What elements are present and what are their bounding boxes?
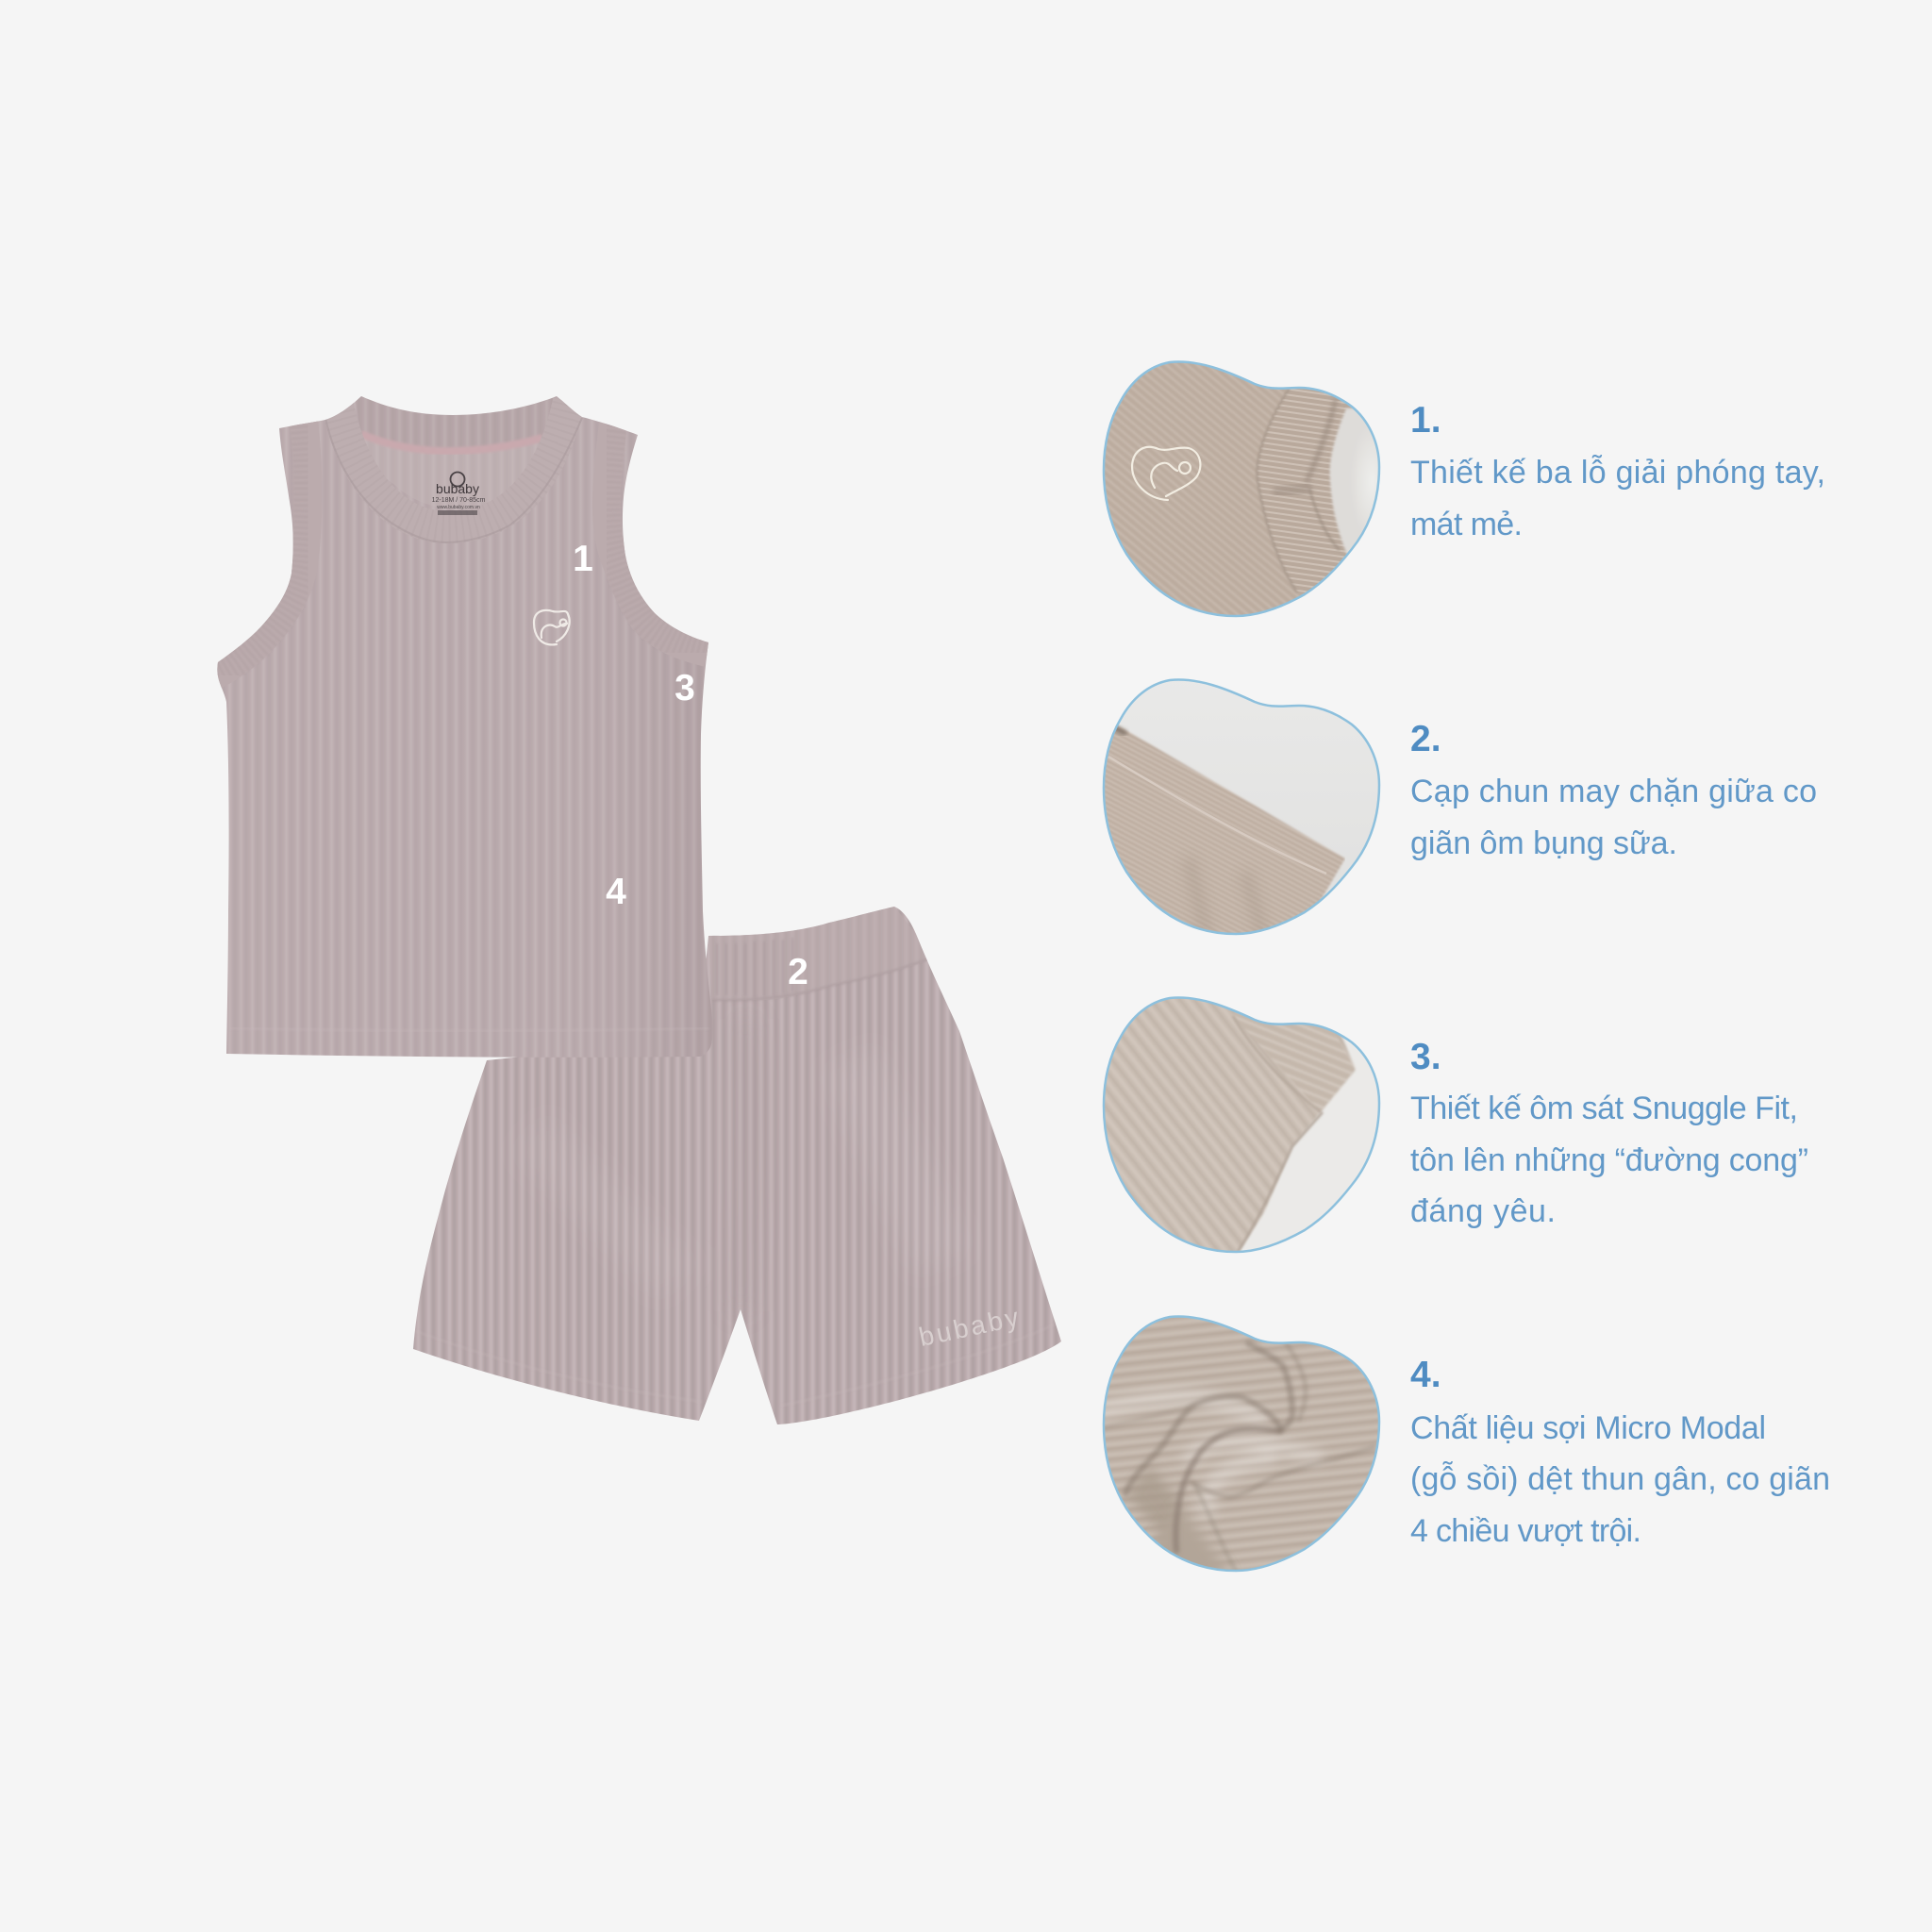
description 4: (gỗ sồi) dệt thun gân, co giãn xyxy=(1410,1461,1830,1497)
description 1 xyxy=(1410,455,1825,542)
marker 3: 3 xyxy=(675,668,695,708)
marker 4: 4 xyxy=(606,872,626,912)
number 2: 2. xyxy=(1410,719,1441,759)
detail photo 3: snuggle fit hem xyxy=(1099,992,1387,1261)
feature text 3 xyxy=(1410,1037,1808,1229)
number 4: 4. xyxy=(1410,1355,1441,1395)
description 2: giãn ôm bụng sữa. xyxy=(1410,825,1677,861)
heart outline xyxy=(1104,680,1379,934)
product: ribbed tank top xyxy=(208,387,726,1066)
brand text on shorts: bubaby xyxy=(916,1302,1024,1352)
neck label: bubaby xyxy=(436,481,479,496)
number 3: 3. xyxy=(1410,1037,1441,1077)
feature text 4 xyxy=(1410,1355,1830,1549)
marker 1: 1 xyxy=(573,539,593,579)
description 2: Cạp chun may chặn giữa co xyxy=(1410,774,1817,809)
neck label xyxy=(432,472,486,515)
collar band xyxy=(325,401,582,542)
description 3 xyxy=(1410,1091,1808,1229)
description 1: Thiết kế ba lỗ giải phóng tay, xyxy=(1410,455,1825,491)
back neck seam xyxy=(361,434,542,451)
armhole band left xyxy=(215,420,308,675)
description 2 xyxy=(1410,774,1817,861)
embroidered logo xyxy=(1132,447,1200,500)
detail photo 4: twisted micro modal fabric xyxy=(1099,1311,1387,1580)
neck label: www.bubaby.com.vn xyxy=(437,505,480,510)
description 1: mát mẻ. xyxy=(1410,507,1523,542)
heart outline xyxy=(1104,998,1379,1252)
description 4 xyxy=(1410,1410,1830,1549)
detail photo 2: elastic waistband xyxy=(1099,675,1387,943)
neck label: 12-18M / 70-85cm xyxy=(432,497,486,504)
heart outline xyxy=(1104,362,1379,616)
feature text 1 xyxy=(1410,400,1825,542)
description 4: Chất liệu sợi Micro Modal xyxy=(1410,1410,1766,1446)
inside back neck xyxy=(360,436,549,509)
heart outline xyxy=(1104,1317,1379,1571)
number markers on the garment xyxy=(573,539,808,992)
armhole band right xyxy=(607,425,708,653)
marker 2: 2 xyxy=(788,952,808,992)
description 4: 4 chiều vượt trội. xyxy=(1410,1513,1641,1549)
embroidered logo on tank xyxy=(534,610,570,644)
description 3: Thiết kế ôm sát Snuggle Fit, xyxy=(1410,1091,1798,1126)
detail photo 1: armhole and logo xyxy=(1099,357,1387,625)
back neck band xyxy=(354,391,566,449)
number 1: 1. xyxy=(1410,400,1441,441)
product: ribbed shorts xyxy=(396,896,1075,1434)
description 3: đáng yêu. xyxy=(1410,1193,1556,1229)
waistband xyxy=(717,916,927,1002)
description 3: tôn lên những “đường cong” xyxy=(1410,1142,1808,1178)
feature text 2 xyxy=(1410,719,1817,861)
